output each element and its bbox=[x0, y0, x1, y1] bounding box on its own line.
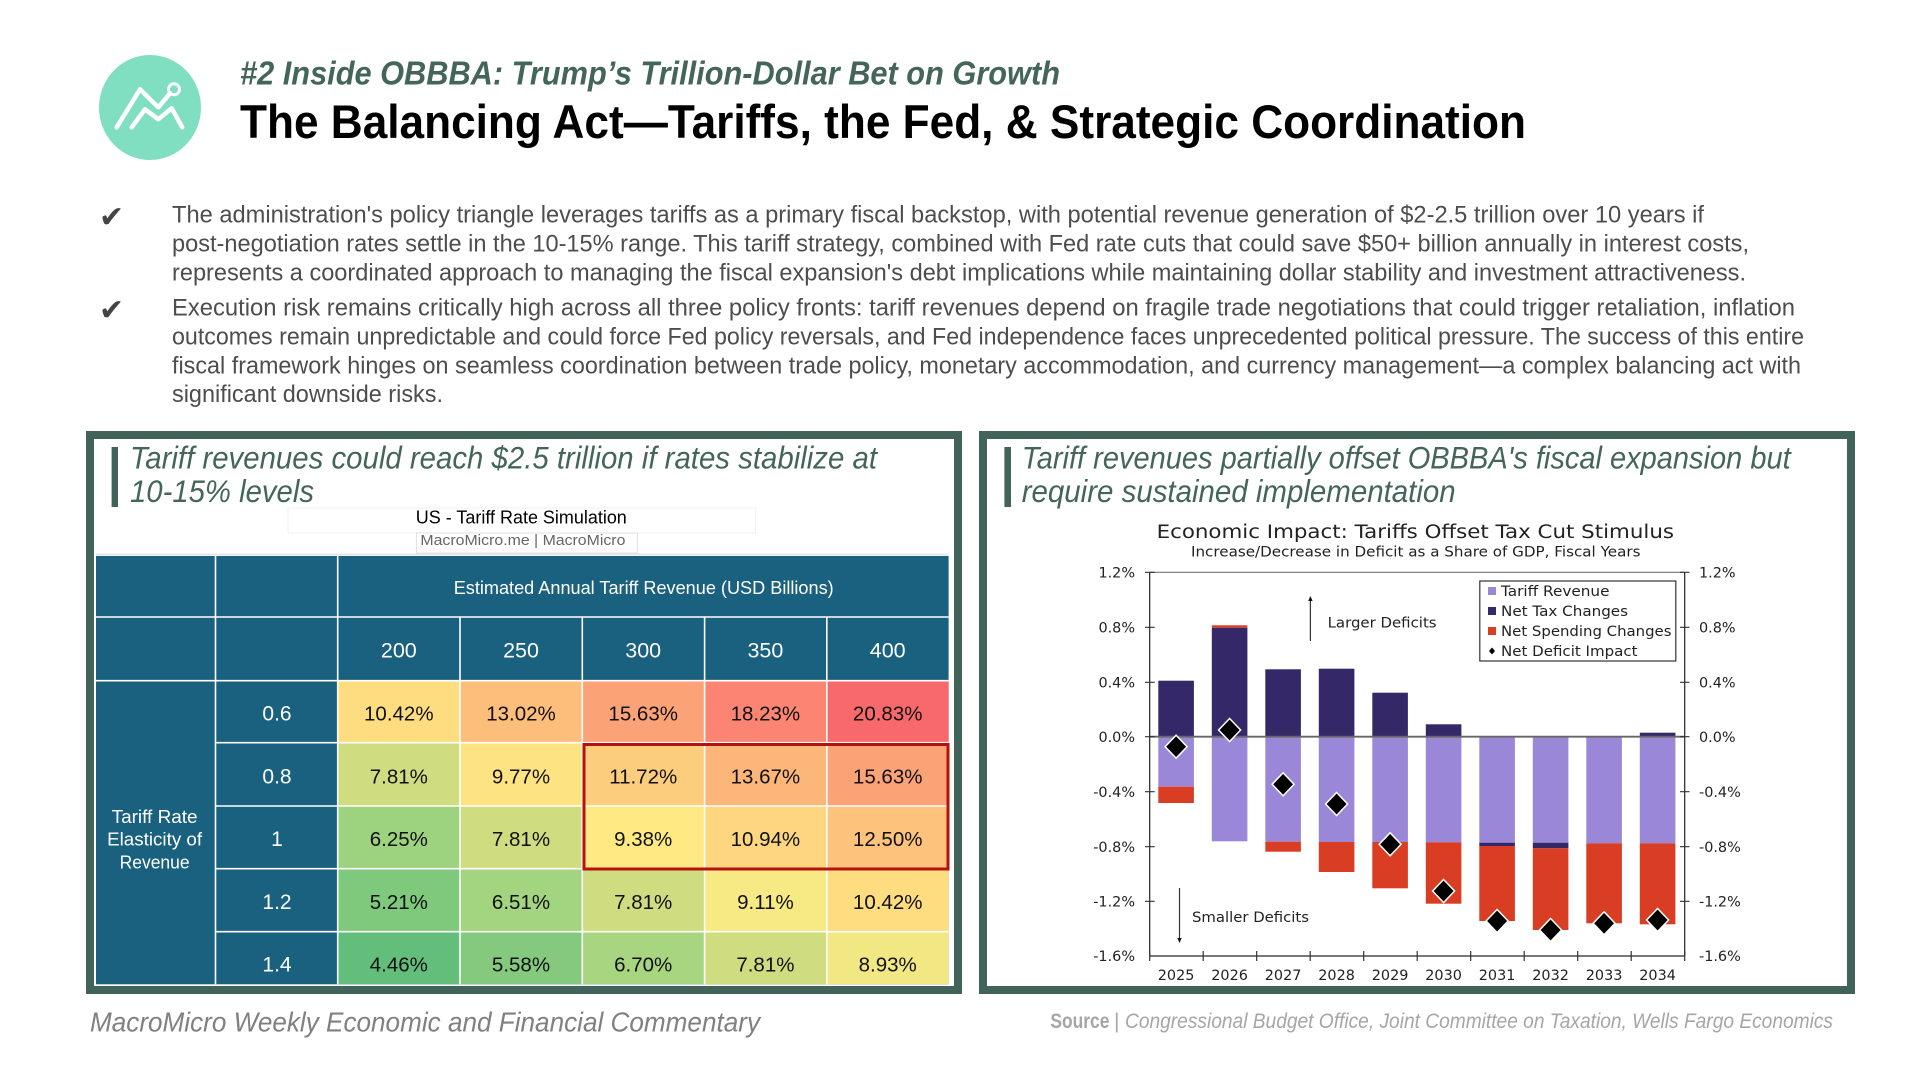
row axis label: Tariff Rate bbox=[112, 807, 198, 827]
right axis labels: -1.6% bbox=[1699, 949, 1741, 965]
text block: second bullet: significant downside risks. bbox=[172, 381, 443, 408]
arrow: smaller deficits bbox=[1177, 888, 1309, 943]
legend: Tariff Revenue bbox=[1500, 584, 1610, 600]
text block: second bullet: outcomes remain unpredictable and could force Fed policy reversals, and Fed independence faces unprecedented political pressure. The success of this entire bbox=[172, 324, 1804, 350]
stacked bar chart bbox=[1093, 566, 1741, 984]
year labels bbox=[1158, 968, 1676, 984]
heatmap values bbox=[364, 703, 922, 977]
legend: Net Deficit Impact bbox=[1501, 644, 1638, 660]
text block: second bullet bbox=[99, 293, 1804, 408]
left axis labels: 0.8% bbox=[1098, 620, 1135, 636]
panel heading: require sustained implementation bbox=[1022, 473, 1456, 509]
icon: check mark: ✔ bbox=[99, 200, 124, 235]
text block: second bullet: Execution risk remains critically high across all three policy fronts: tariff revenues depend on fragile trade negotiations that could trigger retaliation, inflation bbox=[172, 294, 1795, 322]
year labels: 2029 bbox=[1372, 968, 1408, 984]
bars: net spending changes bbox=[1158, 625, 1675, 930]
panel heading bbox=[1022, 440, 1792, 509]
heatmap values: 13.67% bbox=[731, 765, 800, 788]
heatmap values: 9.38% bbox=[614, 828, 672, 851]
panel: tariff revenue simulation bbox=[90, 435, 958, 990]
title: The Balancing Act—Tariffs, the Fed, & Strategic Coordination bbox=[240, 95, 1526, 148]
table title: MacroMicro.me | MacroMicro bbox=[420, 532, 625, 549]
left axis labels: 0.0% bbox=[1098, 730, 1135, 746]
year labels: 2028 bbox=[1318, 968, 1355, 984]
text block: first bullet bbox=[99, 200, 1749, 286]
heatmap values: 13.02% bbox=[486, 703, 556, 726]
footer: source: Source bbox=[1050, 1009, 1109, 1033]
panel: deficit impact chart bbox=[983, 435, 1851, 990]
legend: Net Spending Changes bbox=[1501, 624, 1672, 640]
table title bbox=[288, 506, 756, 553]
heatmap values: 9.11% bbox=[737, 891, 794, 914]
left axis labels: 1.2% bbox=[1098, 566, 1135, 582]
arrow: larger deficits bbox=[1308, 596, 1437, 641]
right axis labels: -0.4% bbox=[1699, 785, 1741, 801]
year labels: 2031 bbox=[1479, 968, 1515, 984]
right axis labels: -0.8% bbox=[1699, 840, 1741, 856]
heatmap table: 0.6 bbox=[262, 703, 292, 726]
heatmap table: 250 bbox=[503, 639, 539, 663]
panel heading: Tariff revenues partially offset OBBBA's fiscal expansion but bbox=[1022, 440, 1792, 476]
year labels: 2034 bbox=[1639, 968, 1676, 984]
heatmap table: 1 bbox=[271, 828, 283, 851]
net deficit impact markers bbox=[1165, 718, 1669, 942]
left axis labels bbox=[1093, 566, 1135, 965]
heatmap values: 20.83% bbox=[853, 703, 922, 726]
axes bbox=[1150, 571, 1685, 573]
heatmap values: 7.81% bbox=[370, 765, 428, 788]
heatmap table: 200 bbox=[381, 639, 417, 663]
text block: second bullet: fiscal framework hinges on seamless coordination between trade policy, monetary accommodation, and currency management—a complex balancing act with bbox=[172, 352, 1801, 380]
heatmap values: 6.51% bbox=[492, 891, 550, 914]
year labels: 2025 bbox=[1158, 968, 1194, 984]
table title: US - Tariff Rate Simulation bbox=[416, 506, 627, 527]
heatmap table: 0.8 bbox=[262, 765, 292, 788]
chart title: Economic Impact: Tariffs Offset Tax Cut Stimulus bbox=[1157, 522, 1674, 543]
heatmap values: 7.81% bbox=[614, 891, 672, 914]
heatmap table: Elasticity of bbox=[107, 830, 203, 850]
text block: first bullet: represents a coordinated approach to managing the fiscal expansion's debt implications while maintaining dollar stability and investment attractiveness. bbox=[172, 260, 1746, 286]
heatmap values: 7.81% bbox=[492, 828, 550, 851]
left axis labels: -1.6% bbox=[1093, 949, 1135, 965]
highlight box bbox=[584, 744, 948, 869]
arrow: smaller deficits: Smaller Deficits bbox=[1192, 910, 1309, 926]
right axis labels: 0.0% bbox=[1699, 730, 1736, 746]
footer: source: | bbox=[1114, 1010, 1119, 1033]
icon: check mark: ✔ bbox=[99, 293, 124, 328]
text block: first bullet: post-negotiation rates settle in the 10-15% range. This tariff strategy, combined with Fed rate cuts that could save $50+ billion annually in interest costs, bbox=[172, 230, 1749, 258]
right axis labels: 1.2% bbox=[1699, 566, 1736, 582]
heatmap values: 9.77% bbox=[492, 765, 550, 788]
heatmap values: 12.50% bbox=[853, 828, 922, 851]
heatmap values: 4.46% bbox=[370, 954, 428, 977]
right axis labels: -1.2% bbox=[1699, 894, 1741, 910]
arrow: larger deficits: Larger Deficits bbox=[1328, 616, 1437, 632]
heatmap values: 10.94% bbox=[731, 828, 800, 851]
left axis labels: 0.4% bbox=[1098, 676, 1135, 692]
year labels: 2032 bbox=[1532, 968, 1569, 984]
heatmap table: 1.4 bbox=[262, 954, 292, 977]
right axis labels bbox=[1699, 566, 1741, 965]
panel heading: 10-15% levels bbox=[130, 473, 314, 509]
heatmap values: 10.42% bbox=[364, 703, 434, 726]
left axis labels: -0.8% bbox=[1093, 840, 1135, 856]
legend: Net Tax Changes bbox=[1501, 604, 1628, 620]
left axis labels: -0.4% bbox=[1093, 785, 1135, 801]
heatmap table: 400 bbox=[870, 639, 906, 663]
table header: Estimated Annual Tariff Revenue (USD Billions) bbox=[454, 577, 834, 598]
year labels: 2033 bbox=[1586, 968, 1622, 984]
heatmap values: 18.23% bbox=[731, 703, 800, 726]
heatmap values: 6.70% bbox=[614, 954, 672, 977]
text block: first bullet: The administration's policy triangle leverages tariffs as a primary fiscal backstop, with potential revenue generation of $2-2.5 trillion over 10 years if bbox=[172, 202, 1704, 228]
legend bbox=[1480, 581, 1676, 661]
heatmap values: 6.25% bbox=[370, 828, 428, 851]
left axis labels: -1.2% bbox=[1093, 894, 1135, 910]
heatmap values: 8.93% bbox=[859, 954, 917, 977]
heatmap values: 7.81% bbox=[736, 954, 794, 977]
icon: chart logo bbox=[99, 55, 201, 160]
bars: net tax changes bbox=[1158, 628, 1675, 848]
footer: source: Congressional Budget Office, Joint Committee on Taxation, Wells Fargo Economics bbox=[1125, 1009, 1833, 1033]
panel heading: Tariff revenues could reach $2.5 trillion if rates stabilize at bbox=[130, 440, 878, 476]
panel heading bbox=[130, 440, 878, 509]
year labels: 2026 bbox=[1211, 968, 1248, 984]
subtitle: #2 Inside OBBBA: Trump’s Trillion-Dollar Bet on Growth bbox=[240, 54, 1060, 92]
heatmap values: 10.42% bbox=[853, 891, 922, 914]
heatmap table: Revenue bbox=[120, 852, 190, 872]
heatmap cells bbox=[338, 681, 949, 984]
heatmap values: 5.58% bbox=[492, 954, 550, 977]
year labels: 2030 bbox=[1425, 968, 1462, 984]
footer: publication name: MacroMicro Weekly Economic and Financial Commentary bbox=[90, 1006, 762, 1038]
chart subtitle: Increase/Decrease in Deficit as a Share of GDP, Fiscal Years bbox=[1191, 544, 1640, 560]
heatmap table: 350 bbox=[747, 639, 783, 663]
bars: tariff revenue bbox=[1158, 737, 1675, 843]
heatmap values: 11.72% bbox=[609, 765, 677, 788]
heatmap values: 15.63% bbox=[853, 765, 922, 788]
heatmap table bbox=[96, 556, 949, 984]
heatmap values: 5.21% bbox=[370, 891, 428, 914]
heatmap values: 15.63% bbox=[608, 703, 678, 726]
year labels: 2027 bbox=[1265, 968, 1301, 984]
right axis labels: 0.4% bbox=[1699, 676, 1736, 692]
heatmap table: 1.2 bbox=[262, 891, 292, 914]
heatmap table: 300 bbox=[625, 639, 661, 663]
right axis labels: 0.8% bbox=[1699, 620, 1736, 636]
